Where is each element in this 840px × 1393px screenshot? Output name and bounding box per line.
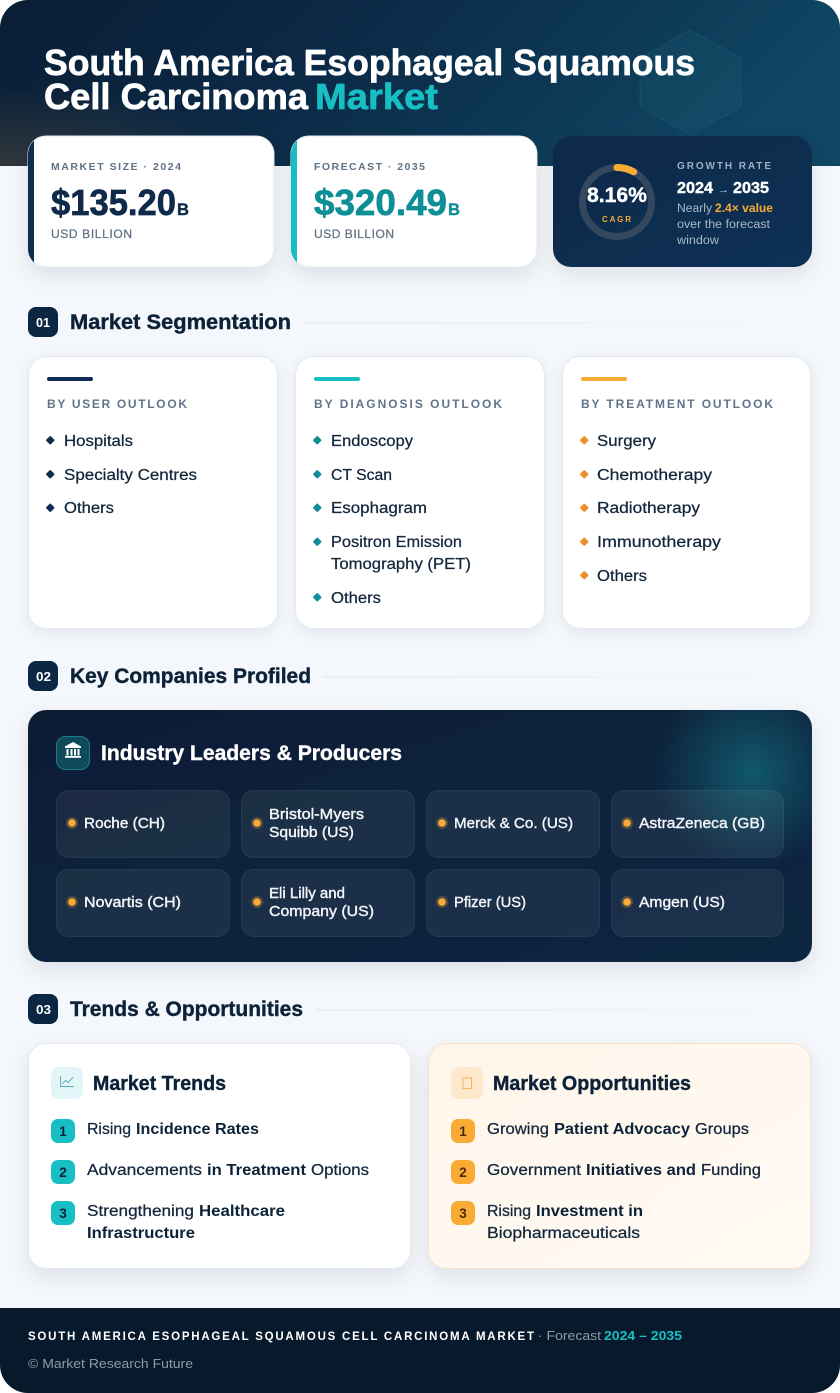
panel: growth rate card: 2024 bbox=[677, 180, 713, 197]
panel: forecast card: USD BILLION bbox=[314, 227, 394, 241]
trend 2: in Treatment bbox=[207, 1162, 306, 1179]
panel: by diagnosis outlook bbox=[296, 356, 544, 628]
company: Merck bbox=[426, 790, 600, 858]
title: Cell Carcinoma bbox=[44, 76, 309, 117]
icon: missing glyph box bbox=[451, 1067, 483, 1099]
trend 2: 2 bbox=[59, 1165, 67, 1180]
panel: by treatment outlook: Radiotherapy bbox=[597, 500, 700, 517]
footer: SOUTH AMERICA ESOPHAGEAL SQUAMOUS CELL CARCINOMA MARKET bbox=[28, 1331, 534, 1343]
panel: market size card: B bbox=[177, 200, 189, 219]
company: Novartis bbox=[56, 870, 230, 936]
panel: growth rate card: 2035 bbox=[733, 180, 769, 197]
heading: key companies profiled: Key Companies Profiled bbox=[70, 665, 311, 688]
title: South America Esophageal Squamous bbox=[44, 42, 695, 83]
panel: forecast card: B bbox=[448, 200, 460, 219]
panel: by diagnosis outlook: Others bbox=[331, 590, 381, 607]
trend 1 bbox=[51, 1119, 259, 1143]
panel: growth rate card: Nearly bbox=[677, 203, 712, 215]
icon: line chart bbox=[51, 1067, 83, 1099]
panel: by user outlook: Hospitals bbox=[64, 433, 133, 450]
opportunity 3: 3 bbox=[459, 1206, 467, 1221]
heading: key companies profiled bbox=[28, 661, 624, 691]
opportunity 1: 1 bbox=[459, 1124, 467, 1139]
trend 2 bbox=[51, 1160, 369, 1184]
footer: · Forecast bbox=[538, 1329, 602, 1343]
panel: by user outlook: Others bbox=[64, 500, 114, 517]
chart: CAGR ring bbox=[582, 167, 652, 236]
panel: by diagnosis outlook: Esophagram bbox=[331, 500, 427, 517]
heading: trends and opportunities: Trends & Opportunities bbox=[70, 998, 303, 1021]
panel: growth rate card: → bbox=[718, 184, 729, 196]
chart: CAGR ring: CAGR bbox=[602, 215, 631, 224]
footer: © Market Research Future bbox=[28, 1357, 193, 1371]
trend 3: Infrastructure bbox=[87, 1225, 195, 1242]
company: Bristol-Myers Squibb: Squibb (US) bbox=[269, 825, 354, 841]
panel: by treatment outlook: Chemotherapy bbox=[597, 467, 712, 484]
panel: growth rate card: window bbox=[676, 235, 720, 247]
panel: market size card: MARKET SIZE · 2024 bbox=[51, 161, 181, 173]
icon: institution building bbox=[56, 736, 90, 770]
panel: by diagnosis outlook: Positron Emission bbox=[331, 534, 462, 551]
panel: industry leaders and producers bbox=[24, 710, 816, 974]
chart: CAGR ring: 8.16% bbox=[587, 184, 647, 207]
trend 1: Incidence Rates bbox=[136, 1121, 259, 1138]
opportunity 1: Patient Advocacy bbox=[554, 1121, 690, 1138]
company: Roche: Roche (CH) bbox=[84, 816, 165, 832]
panel: by user outlook bbox=[28, 356, 278, 628]
trend 1: 1 bbox=[59, 1124, 67, 1139]
title: Market bbox=[315, 76, 438, 117]
panel: growth rate card: 2.4× value bbox=[715, 203, 773, 215]
company: Bristol-Myers Squibb bbox=[242, 790, 414, 858]
panel: market trends: Market Trends bbox=[93, 1073, 226, 1095]
trend 2: Advancements bbox=[87, 1162, 202, 1179]
panel: forecast card bbox=[291, 136, 537, 267]
trend 3: Healthcare bbox=[199, 1203, 285, 1220]
footer bbox=[0, 1308, 840, 1393]
panel: market size card bbox=[28, 136, 274, 267]
company: Pfizer: Pfizer (US) bbox=[454, 895, 526, 911]
panel: by treatment outlook: Surgery bbox=[597, 433, 656, 450]
panel: by treatment outlook bbox=[562, 356, 810, 628]
panel: by treatment outlook: Others bbox=[597, 568, 647, 585]
panel: by diagnosis outlook: Tomography (PET) bbox=[331, 556, 471, 573]
panel: by user outlook: BY USER OUTLOOK bbox=[47, 397, 187, 411]
title bbox=[44, 48, 694, 110]
trend 3 bbox=[51, 1201, 284, 1238]
company: AstraZeneca: AstraZeneca (GB) bbox=[639, 816, 765, 832]
company: Amgen: Amgen (US) bbox=[639, 895, 725, 911]
panel: by user outlook: Specialty Centres bbox=[64, 467, 197, 484]
opportunity 1: Groups bbox=[695, 1121, 749, 1138]
heading: trends and opportunities: 03 bbox=[36, 1002, 51, 1017]
panel: growth rate card: over the forecast bbox=[677, 219, 771, 231]
panel: growth rate card bbox=[553, 136, 812, 267]
company: Eli Lilly: Company (US) bbox=[269, 904, 374, 920]
trend 2: Options bbox=[311, 1162, 369, 1179]
opportunity 2: Initiatives and bbox=[586, 1162, 696, 1179]
opportunity 1: Growing bbox=[487, 1121, 549, 1138]
heading: trends and opportunities bbox=[28, 994, 622, 1024]
panel: market trends bbox=[28, 1044, 410, 1268]
company: Bristol-Myers Squibb: Bristol-Myers bbox=[269, 807, 364, 823]
icon: decorative hexagon bbox=[640, 30, 741, 135]
opportunity 2: Government bbox=[487, 1162, 582, 1179]
panel: market size card: $135.20 bbox=[51, 182, 176, 223]
panel: growth rate card: GROWTH RATE bbox=[677, 161, 771, 172]
panel: forecast card: $320.49 bbox=[314, 182, 447, 223]
heading: market segmentation bbox=[28, 307, 616, 337]
company: Eli Lilly bbox=[242, 870, 414, 936]
opportunity 3: Biopharmaceuticals bbox=[487, 1225, 640, 1242]
opportunity 3: Rising bbox=[487, 1203, 531, 1220]
opportunity 2 bbox=[451, 1160, 761, 1184]
panel: by diagnosis outlook: CT Scan bbox=[331, 467, 392, 484]
panel: by treatment outlook: BY TREATMENT OUTLOOK bbox=[581, 397, 773, 411]
company: Eli Lilly: Eli Lilly and bbox=[269, 886, 345, 902]
trend 3: Strengthening bbox=[87, 1203, 194, 1220]
opportunity 1 bbox=[451, 1119, 749, 1143]
header banner bbox=[0, 0, 840, 166]
company: Pfizer bbox=[426, 870, 600, 936]
heading: market segmentation: Market Segmentation bbox=[70, 311, 291, 334]
opportunity 3 bbox=[451, 1201, 643, 1242]
panel: market size card: USD BILLION bbox=[51, 227, 132, 241]
company: Merck: Merck & Co. (US) bbox=[454, 816, 573, 832]
trend 3: 3 bbox=[59, 1206, 67, 1221]
panel: by diagnosis outlook: BY DIAGNOSIS OUTLOOK bbox=[314, 397, 502, 411]
company: Novartis: Novartis (CH) bbox=[84, 895, 181, 911]
panel: by diagnosis outlook: Endoscopy bbox=[331, 433, 413, 450]
panel: market opportunities bbox=[428, 1044, 810, 1268]
heading: key companies profiled: 02 bbox=[36, 669, 51, 684]
trend 1: Rising bbox=[87, 1121, 131, 1138]
opportunity 3: Investment in bbox=[536, 1203, 643, 1220]
footer: 2024 – 2035 bbox=[604, 1329, 682, 1343]
panel: market opportunities: Market Opportunities bbox=[493, 1073, 691, 1095]
company: Roche bbox=[56, 790, 230, 858]
panel: industry leaders and producers: Industry Leaders & Producers bbox=[101, 742, 402, 765]
opportunity 2: 2 bbox=[459, 1165, 467, 1180]
heading: market segmentation: 01 bbox=[36, 315, 50, 330]
panel: forecast card: FORECAST · 2035 bbox=[314, 161, 425, 173]
panel: by treatment outlook: Immunotherapy bbox=[597, 534, 721, 551]
opportunity 2: Funding bbox=[701, 1162, 761, 1179]
company: AstraZeneca bbox=[612, 790, 784, 858]
company: Amgen bbox=[612, 870, 784, 936]
